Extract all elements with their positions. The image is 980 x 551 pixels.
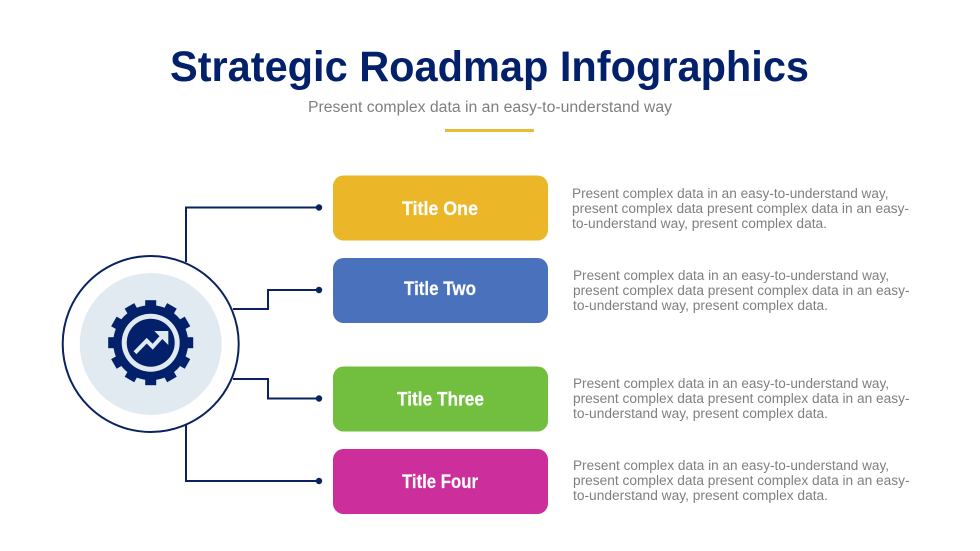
- text block: title two: [573, 268, 910, 313]
- text block: title three: [573, 376, 910, 421]
- icon: gear with rising arrow: [108, 300, 193, 385]
- card: title two: Title Two: [404, 278, 476, 300]
- card: title four: [333, 449, 548, 514]
- connector: title one: [186, 204, 322, 262]
- hub inner disc: [80, 273, 222, 415]
- text block: title four: Present complex data in an easy-to-understand way,: [573, 458, 889, 473]
- text block: title four: [573, 458, 910, 503]
- text block: title one: [572, 186, 909, 231]
- card: title four: Title Four: [402, 471, 478, 493]
- text block: title three: present complex data present complex data in an easy-: [573, 391, 910, 406]
- title underline: [445, 129, 534, 132]
- text block: title three: to-understand way, present complex data.: [573, 406, 828, 421]
- card: title two: [333, 258, 548, 323]
- text block: title two: Present complex data in an easy-to-understand way,: [573, 268, 889, 283]
- text block: title one: present complex data present complex data in an easy-: [572, 201, 909, 216]
- text block: title three: Present complex data in an easy-to-understand way,: [573, 376, 889, 391]
- connector: title three: [233, 379, 322, 402]
- hub outer ring: [63, 256, 239, 432]
- card: title three: [333, 366, 548, 432]
- text block: title two: to-understand way, present complex data.: [573, 298, 828, 313]
- card: title three: Title Three: [397, 388, 484, 410]
- subtitle: Present complex data in an easy-to-understand way: [308, 99, 672, 116]
- text block: title two: present complex data present complex data in an easy-: [573, 283, 910, 298]
- card: title one: [333, 176, 548, 240]
- text block: title one: Present complex data in an easy-to-understand way,: [572, 186, 888, 201]
- connector: title four: [186, 425, 322, 484]
- title: Strategic Roadmap Infographics: [170, 43, 809, 91]
- text block: title four: to-understand way, present complex data.: [573, 488, 828, 503]
- connector: title two: [233, 287, 322, 309]
- text block: title one: to-understand way, present complex data.: [572, 216, 827, 231]
- connectors: [186, 204, 322, 484]
- hub circle with gear icon: [63, 256, 239, 432]
- text block: title four: present complex data present complex data in an easy-: [573, 473, 910, 488]
- card: title one: Title One: [402, 198, 478, 220]
